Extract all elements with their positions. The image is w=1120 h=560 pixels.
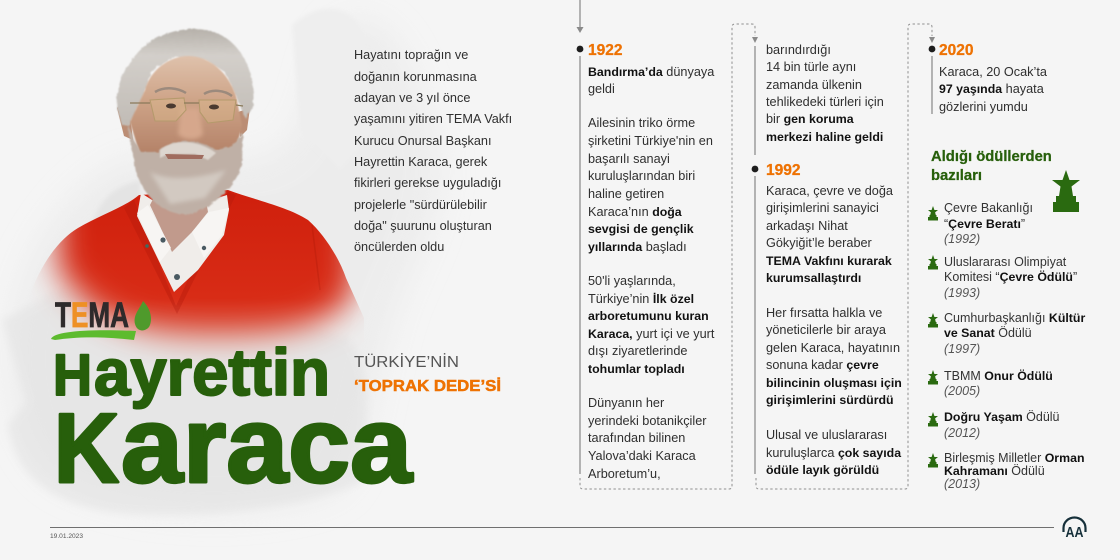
timeline column 1: yıllarında başladı <box>588 240 687 254</box>
timeline column 2 <box>766 43 902 477</box>
timeline column 1: Karaca’nın doğa <box>588 205 682 219</box>
award 4: TBMM Onur Ödülü <box>944 368 1053 383</box>
intro text: Hayatını toprağın ve <box>354 48 468 62</box>
timeline column 1: 50'li yaşlarında, <box>588 274 676 288</box>
timeline column 2: girişimlerini sanayici <box>766 201 879 215</box>
intro text: Hayrettin Karaca, gerek <box>354 155 488 169</box>
intro text: projelerle "sürdürülebilir <box>354 198 488 212</box>
timeline column 1: kuruluşlarından biri <box>588 169 695 183</box>
year 2020: 2020 <box>939 42 973 59</box>
timeline column 1: Dünyanın her <box>588 396 665 410</box>
timeline column 2: bilincinin oluşması için <box>766 376 902 390</box>
award 2: Uluslararası Olimpiyat <box>944 255 1067 269</box>
timeline column 2: zamanda ülkenin <box>766 78 862 92</box>
timeline column 2: Karaca, çevre ve doğa <box>766 184 894 198</box>
ears <box>117 106 250 140</box>
face <box>130 56 242 155</box>
timeline column 1: başarılı sanayi <box>588 152 670 166</box>
portrait of Hayrettin Karaca <box>28 29 364 370</box>
name title: H <box>53 343 92 408</box>
timeline column 1: tohumlar topladı <box>588 362 685 376</box>
intro text: fikirleri gerekse uyguladığı <box>354 176 501 190</box>
award 2 <box>928 255 1077 300</box>
timeline column 3: gözlerini yumdu <box>939 100 1028 114</box>
intro text: adayan ve 3 yıl önce <box>354 91 470 105</box>
icon: AA logo: AA <box>1066 524 1084 541</box>
award 1: Çevre Bakanlığı <box>944 201 1033 215</box>
name title: ayrettin <box>94 335 330 409</box>
name title: araca <box>121 384 413 505</box>
award 1: (1992) <box>944 232 980 246</box>
timeline column 2: sonuna kadar çevre <box>766 358 879 372</box>
intro text: Kurucu Onursal Başkanı <box>354 134 492 148</box>
timeline column 2: kuruluşlarca çok sayıda <box>766 446 901 460</box>
timeline column 1: sevgisi de gençlik <box>588 222 694 236</box>
timeline column 1: Arboretum’u, <box>588 467 661 481</box>
hair <box>117 29 254 125</box>
award 4: (2005) <box>944 384 980 398</box>
award 5: Doğru Yaşam Ödülü <box>944 410 1060 424</box>
timeline column 1: şirketini Türkiye'nin en <box>588 134 713 148</box>
date: 19.01.2023 <box>50 533 83 540</box>
intro text: doğa" şuurunu oluşturan <box>354 219 492 233</box>
timeline column 1: tarafından bilinen <box>588 431 685 445</box>
award 1 <box>928 201 1033 246</box>
awards heading <box>931 149 1052 184</box>
timeline dots <box>577 46 935 172</box>
timeline column 1: geldi <box>588 82 615 96</box>
timeline column 1: Karaca, yurt içi ve yurt <box>588 327 715 341</box>
TEMA logo: TEMA <box>55 296 129 335</box>
timeline column 1: Ailesinin triko örme <box>588 116 695 130</box>
timeline column 2: yöneticilerle bir araya <box>766 323 887 337</box>
name title <box>53 335 413 505</box>
timeline column 2: merkezi haline geldi <box>766 130 883 144</box>
icon: AA logo <box>1064 518 1086 541</box>
award 6: Kahramanı Ödülü <box>944 464 1045 478</box>
subtitle: TÜRKİYE’NİN <box>354 352 459 371</box>
timeline column 2: Her fırsatta halkla ve <box>766 306 882 320</box>
timeline column 2: kurumsallaştırdı <box>766 271 861 285</box>
award 5 <box>928 410 1060 440</box>
subtitle <box>354 352 501 395</box>
timeline column 2: ödüle layık görüldü <box>766 463 879 477</box>
award 1: “Çevre Beratı” <box>944 217 1025 231</box>
timeline column 2: tehlikedeki türleri için <box>766 95 884 109</box>
intro text <box>354 48 512 254</box>
timeline column 2: arkadaşı Nihat <box>766 219 848 233</box>
footer rule <box>50 526 1054 528</box>
icon: large trophy star <box>1052 170 1080 212</box>
timeline column 1: haline getiren <box>588 187 664 201</box>
award 6: (2013) <box>944 477 980 491</box>
year 1992: 1992 <box>766 162 800 179</box>
award 3: (1997) <box>944 342 980 356</box>
award 3: ve Sanat Ödülü <box>944 326 1032 340</box>
award 2: (1993) <box>944 286 980 300</box>
award 5: (2012) <box>944 426 980 440</box>
red sweater <box>28 190 364 370</box>
award 6 <box>928 451 1084 491</box>
timeline column 2: Ulusal ve uluslararası <box>766 428 887 442</box>
intro text: doğanın korunmasına <box>354 70 478 84</box>
awards heading: Aldığı ödüllerden <box>931 149 1052 165</box>
timeline column 1: arboretumunu kuran <box>588 309 709 323</box>
timeline column 3: 97 yaşında hayata <box>939 82 1045 96</box>
timeline column 1 <box>588 42 715 481</box>
year 1922: 1922 <box>588 42 622 59</box>
award 3 <box>928 311 1085 356</box>
timeline connector lines <box>580 0 932 489</box>
timeline column 2: Gökyiğit’le beraber <box>766 236 873 250</box>
nose <box>178 108 203 139</box>
timeline column 1: yerindeki botanikçiler <box>588 414 707 428</box>
timeline column 2: barındırdığı <box>766 43 831 57</box>
timeline column 1: dışı ziyaretlerinde <box>588 344 687 358</box>
timeline column 2: gelen Karaca, hayatının <box>766 341 900 355</box>
arrowheads <box>576 27 935 43</box>
eyebrows <box>155 88 232 96</box>
awards list <box>928 201 1085 491</box>
awards heading: bazıları <box>931 168 982 184</box>
timeline column 3 <box>939 42 1048 114</box>
subtitle: ‘TOPRAK DEDE’Sİ <box>354 377 501 395</box>
shirt <box>137 193 229 292</box>
timeline column 2: girişimlerini sürdürdü <box>766 393 894 407</box>
name title: K <box>54 393 119 503</box>
timeline column 1: Bandırma’da dünyaya <box>588 65 715 79</box>
timeline column 1: Yalova’daki Karaca <box>588 449 697 463</box>
award 2: Komitesi “Çevre Ödülü” <box>944 269 1077 284</box>
glasses <box>150 98 236 123</box>
beard <box>127 122 243 214</box>
timeline column 2: bir gen koruma <box>766 112 854 126</box>
award 3: Cumhurbaşkanlığı Kültür <box>944 311 1085 325</box>
award 6: Birleşmiş Milletler Orman <box>944 451 1084 465</box>
timeline column 1: Türkiye’nin İlk özel <box>588 291 694 306</box>
timeline column 2: TEMA Vakfını kurarak <box>766 254 892 268</box>
timeline column 2: 14 bin türle aynı <box>766 60 856 74</box>
award 4 <box>928 368 1053 398</box>
intro text: yaşamını yitiren TEMA Vakfı <box>354 112 512 126</box>
intro text: öncülerden oldu <box>354 240 444 254</box>
timeline column 3: Karaca, 20 Ocak’ta <box>939 65 1048 79</box>
